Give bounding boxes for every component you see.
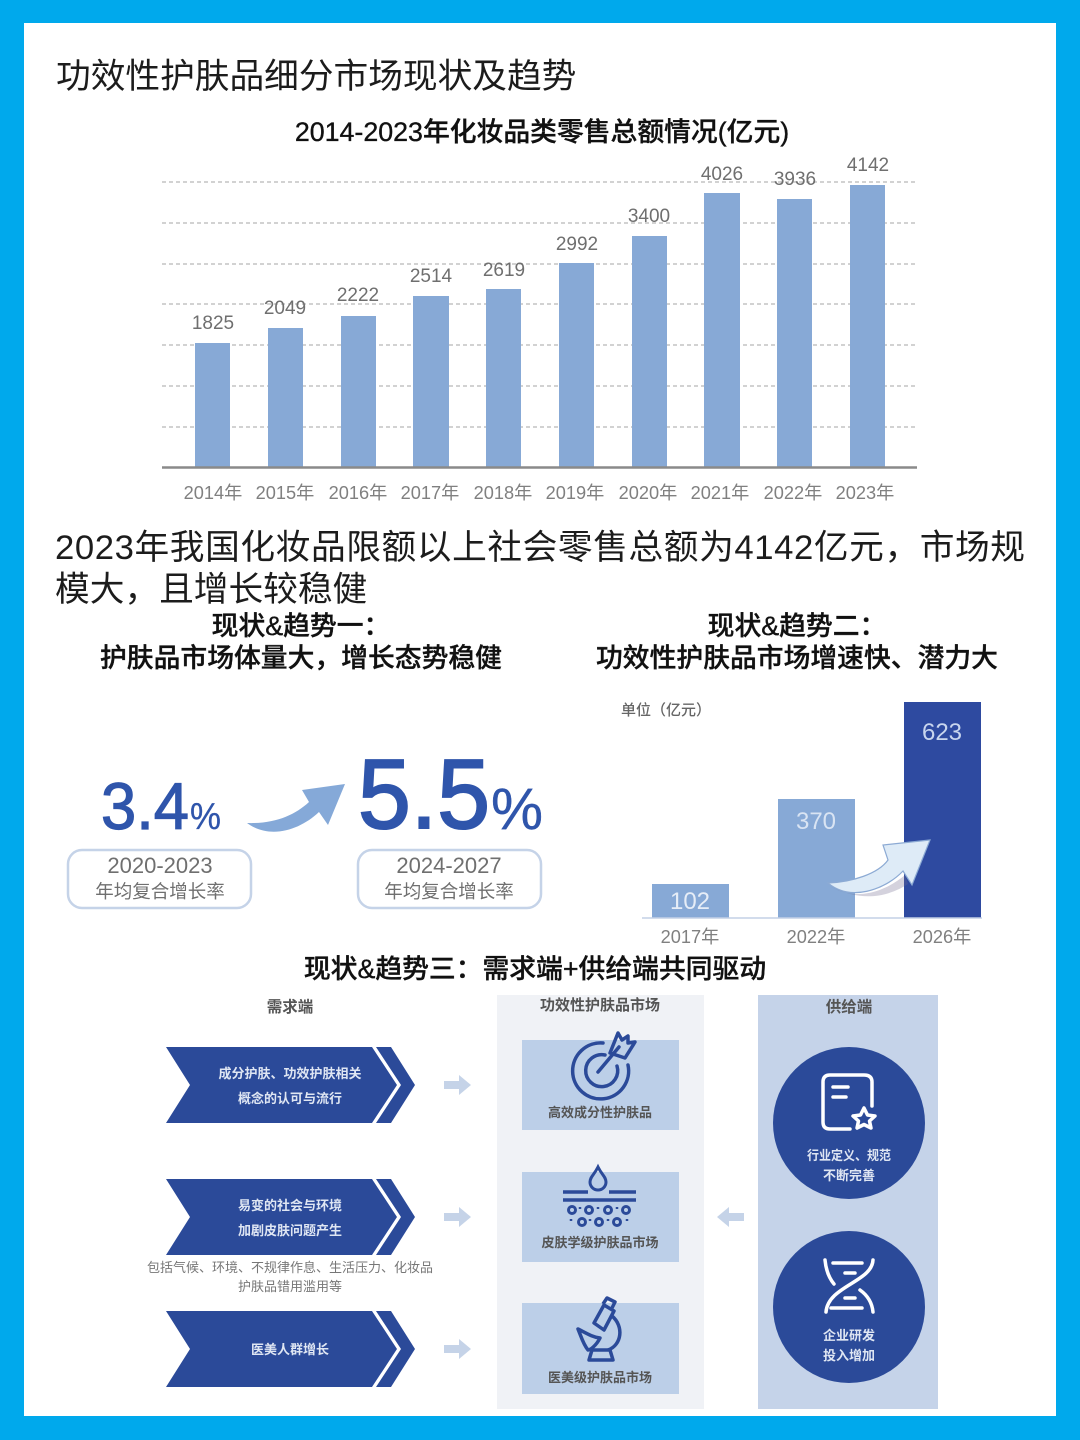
label box: 2024-2027: 2024-2027: [396, 853, 502, 878]
bar chart: functional skincare market size: 2026年: [913, 927, 971, 947]
chart title: 2014-2023年化妆品类零售总额情况(亿元): [295, 117, 789, 147]
heading: trend one: 护肤品市场体量大，增长态势稳健: [100, 643, 502, 673]
note text: 护肤品错用滥用等: [238, 1279, 342, 1294]
arrow: [444, 1075, 471, 1095]
card: high-efficacy: 高效成分性护肤品: [548, 1105, 652, 1120]
circle: industry standards: 行业定义、规范: [807, 1148, 891, 1163]
bar chart: retail totals 2014-2023: 2222: [337, 285, 379, 306]
circle: industry standards: 不断完善: [823, 1168, 875, 1183]
chevron: ingredient awareness: 成分护肤、功效护肤相关: [218, 1066, 362, 1081]
chevron: changing environment: 易变的社会与环境: [238, 1198, 342, 1213]
chevron: medical beauty population: [166, 1311, 415, 1387]
card: medical-grade: 医美级护肤品市场: [548, 1370, 652, 1385]
bar chart: retail totals 2014-2023: 4142: [847, 155, 889, 176]
circle: industry standards: [773, 1047, 925, 1199]
chevron: ingredient awareness: 概念的认可与流行: [238, 1091, 342, 1106]
bar chart: retail totals 2014-2023: 4026: [701, 164, 743, 185]
arrow: growth overlay: [828, 840, 930, 896]
summary text: 2023年我国化妆品限额以上社会零售总额为4142亿元，市场规: [55, 528, 1025, 567]
icon: DNA helix: [825, 1260, 873, 1312]
summary text: [55, 528, 1025, 609]
bar chart: retail totals 2014-2023: 2021年: [691, 483, 749, 503]
heading: trend one: 现状&趋势一：: [212, 611, 390, 641]
bar chart: functional skincare market size: 2017年: [661, 927, 719, 947]
bar chart: retail totals 2014-2023: 2019年: [546, 483, 604, 503]
bar chart: functional skincare market size: 623: [922, 719, 962, 746]
chevron: medical beauty population: 医美人群增长: [251, 1342, 329, 1357]
bar chart: retail totals 2014-2023: 2049: [264, 298, 306, 319]
column: functional skincare market: 功效性护肤品市场: [540, 996, 660, 1014]
arrow: [444, 1207, 471, 1227]
bar chart: retail totals 2014-2023: 2514: [410, 266, 453, 287]
bar chart: functional skincare market size: 单位（亿元）: [621, 701, 711, 719]
label box: 2020-2023: [68, 850, 251, 908]
label box: 2020-2023: 2020-2023: [107, 853, 213, 878]
bar chart: retail totals 2014-2023: 3400: [628, 206, 670, 227]
bar chart: retail totals 2014-2023: 2016年: [329, 483, 387, 503]
heading: trend three: 现状&趋势三：需求端+供给端共同驱动: [304, 954, 766, 984]
stat: 5.5 percent: %: [491, 777, 543, 842]
stat: 3.4 percent: %: [190, 796, 221, 837]
bar chart: retail totals 2014-2023: 2022年: [764, 483, 822, 503]
circle: R&D investment: 企业研发: [823, 1328, 875, 1343]
bar chart: retail totals 2014-2023: 2015年: [256, 483, 314, 503]
circle: R&D investment: [773, 1231, 925, 1383]
icon: target: [573, 1033, 635, 1099]
column: supply side: 供给端: [826, 997, 872, 1016]
column: supply side: [758, 995, 938, 1409]
bar chart: retail totals 2014-2023: 3936: [774, 169, 816, 190]
icon: microscope: [578, 1298, 620, 1360]
column: demand side: [147, 998, 471, 1387]
arrow: growth: [247, 784, 345, 832]
icon: document with star: [823, 1075, 875, 1129]
card: medical-grade: [522, 1298, 679, 1394]
heading: trend two: 功效性护肤品市场增速快、潜力大: [596, 643, 998, 673]
arrow: supply to market: [717, 1207, 744, 1227]
summary text: 模大，且增长较稳健: [55, 570, 367, 609]
card: dermatological: [522, 1167, 679, 1262]
bar chart: functional skincare market size: 102: [670, 888, 710, 915]
label box: 2020-2023: 年均复合增长率: [95, 881, 225, 902]
chevron: ingredient awareness: [166, 1047, 415, 1123]
note text: [147, 1260, 433, 1294]
chevron: changing environment: [166, 1179, 415, 1255]
heading: trend two: [596, 611, 998, 673]
title: 功效性护肤品细分市场现状及趋势: [56, 57, 576, 96]
heading: trend two: 现状&趋势二：: [708, 611, 886, 641]
icon: skin droplet: [563, 1167, 636, 1226]
circle: R&D investment: 投入增加: [823, 1348, 875, 1363]
bar chart: functional skincare market size: 370: [796, 808, 836, 835]
card: high-efficacy: [522, 1033, 679, 1130]
bar chart: retail totals 2014-2023: 2018年: [474, 483, 532, 503]
column: demand side: 需求端: [267, 998, 313, 1016]
card: dermatological: 皮肤学级护肤品市场: [541, 1235, 659, 1250]
growth rate comparison: [68, 739, 543, 908]
arrow: [444, 1339, 471, 1359]
bar chart: functional skincare market size: 2022年: [787, 927, 845, 947]
chevron: changing environment: 加剧皮肤问题产生: [238, 1223, 342, 1238]
bar chart: retail totals 2014-2023: 2017年: [401, 483, 459, 503]
column: functional skincare market: [497, 995, 704, 1409]
stat: 3.4 percent: 3.4: [101, 769, 189, 843]
bar chart: retail totals 2014-2023: 2619: [483, 260, 525, 281]
bar chart: retail totals 2014-2023: 1825: [192, 313, 234, 334]
heading: trend one: [100, 611, 502, 673]
bar chart: functional skincare market size: [621, 701, 982, 947]
stat: 5.5 percent: 5.5: [358, 739, 490, 849]
label box: 2024-2027: [358, 850, 541, 908]
note text: 包括气候、环境、不规律作息、生活压力、化妆品: [147, 1260, 433, 1275]
bar chart: retail totals 2014-2023: 2992: [556, 234, 598, 255]
bar chart: retail totals 2014-2023: [162, 155, 917, 503]
bar chart: retail totals 2014-2023: 2023年: [836, 483, 894, 503]
label box: 2024-2027: 年均复合增长率: [384, 881, 514, 902]
bar chart: retail totals 2014-2023: 2014年: [184, 483, 242, 503]
bar chart: retail totals 2014-2023: 2020年: [619, 483, 677, 503]
